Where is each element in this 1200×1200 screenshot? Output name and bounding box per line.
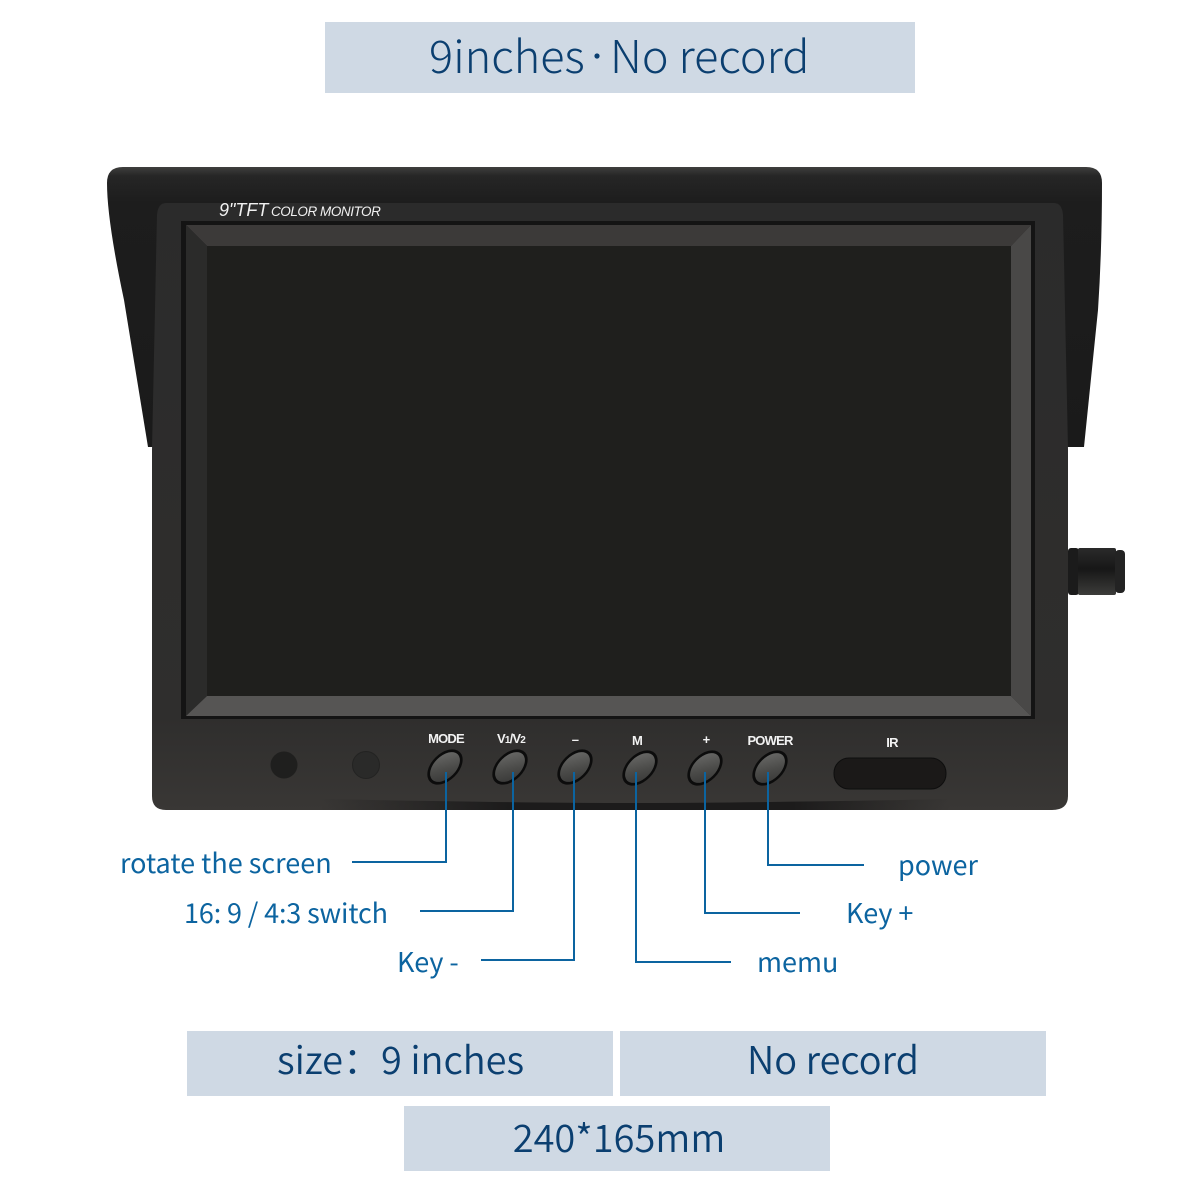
- monitor: [107, 167, 1125, 810]
- spec: no record: [620, 1030, 1046, 1096]
- spec: size: size：: [277, 1030, 381, 1085]
- sensors: [270, 752, 380, 778]
- IR window: [834, 758, 946, 789]
- callout: 16:9 / 4:3 switch: 16: 9 / 4:3 switch: [184, 892, 388, 931]
- callout: Key -: [397, 772, 574, 980]
- button labels: MODE: [428, 731, 465, 746]
- title banner: 9inches: [429, 21, 585, 86]
- spec: no record: No record: [747, 1030, 919, 1085]
- bezel recess: [181, 221, 1035, 719]
- model label: COLOR MONITOR: [271, 204, 381, 219]
- callout: memu: memu: [757, 941, 838, 980]
- bezel bottom bevel: [186, 696, 1031, 716]
- buttons: [421, 743, 794, 792]
- callout: power: power: [898, 844, 978, 883]
- button labels: +: [703, 732, 711, 747]
- bezel left bevel: [186, 225, 207, 716]
- callout: 16:9 / 4:3 switch: [184, 772, 513, 931]
- button labels: –: [572, 732, 579, 747]
- button labels: IR: [886, 735, 899, 750]
- bezel top bevel: [186, 225, 1031, 246]
- callout: rotate the screen: [120, 772, 446, 881]
- bezel right bevel: [1011, 225, 1031, 716]
- screen: [207, 246, 1011, 696]
- model label: [219, 200, 381, 220]
- spec: dimensions: 240*165mm: [513, 1108, 725, 1163]
- callout: rotate the screen: rotate the screen: [120, 842, 332, 881]
- title banner: No record: [610, 21, 810, 86]
- bottom edge shadow: [320, 799, 950, 810]
- monitor body: [152, 203, 1068, 810]
- connector knob: [1068, 548, 1125, 595]
- spec: size: [187, 1030, 613, 1096]
- title banner: [325, 21, 915, 93]
- callout: power: [768, 772, 978, 883]
- callout: Key +: [705, 772, 913, 931]
- button labels: M: [632, 733, 642, 748]
- callout: memu: [636, 772, 838, 980]
- callout: Key +: Key +: [846, 892, 913, 931]
- button labels: POWER: [747, 733, 794, 748]
- spec: size: 9 inches: [381, 1030, 524, 1085]
- spec: dimensions: [404, 1106, 830, 1171]
- button labels: [428, 731, 899, 750]
- model label: 9"TFT: [219, 200, 270, 220]
- callout: Key -: Key -: [397, 941, 459, 980]
- sun hood: [107, 167, 1102, 460]
- button labels: V1/V2: [497, 731, 526, 746]
